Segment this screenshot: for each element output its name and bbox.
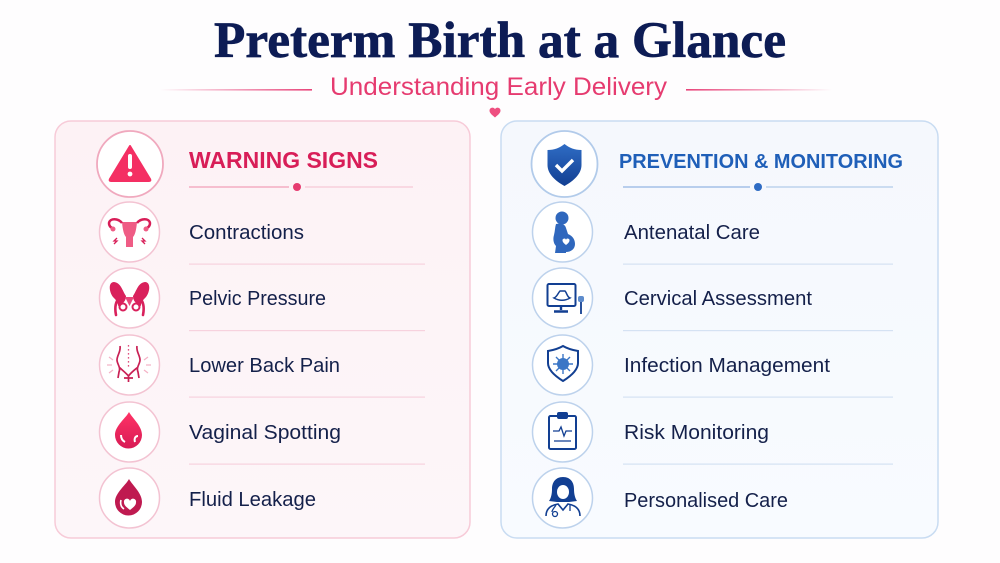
item: personalised care bbox=[532, 468, 788, 528]
item: vaginal spotting bbox=[100, 402, 341, 462]
panel heading: prevention and monitoring bbox=[532, 131, 903, 197]
item: risk monitoring bbox=[532, 402, 769, 462]
subtitle: Understanding Early Delivery bbox=[330, 73, 668, 101]
item: fluid leakage: Fluid Leakage bbox=[189, 489, 316, 511]
item: pelvic pressure bbox=[100, 268, 326, 328]
item: lower back pain: Lower Back Pain bbox=[189, 355, 340, 377]
item: infection management bbox=[532, 335, 830, 395]
item: cervical assessment: Cervical Assessment bbox=[624, 288, 812, 310]
panel: prevention and monitoring bbox=[501, 121, 938, 538]
panel heading: warning signs bbox=[97, 131, 413, 197]
item: cervical assessment bbox=[532, 268, 812, 328]
item: contractions: Contractions bbox=[189, 222, 304, 244]
item: personalised care: Personalised Care bbox=[624, 490, 788, 512]
item: risk monitoring: Risk Monitoring bbox=[624, 422, 769, 444]
panel: warning signs bbox=[55, 121, 470, 538]
item: antenatal care bbox=[532, 202, 760, 262]
title: Preterm Birth at a Glance bbox=[214, 13, 786, 69]
item: pelvic pressure: Pelvic Pressure bbox=[189, 288, 326, 310]
item: contractions bbox=[100, 202, 304, 262]
item: vaginal spotting: Vaginal Spotting bbox=[189, 422, 341, 444]
item: lower back pain bbox=[100, 335, 340, 395]
panel heading: prevention and monitoring: PREVENTION & MONITORING bbox=[619, 151, 903, 173]
panel heading: warning signs: WARNING SIGNS bbox=[189, 147, 378, 173]
item: infection management: Infection Management bbox=[624, 355, 830, 377]
item: fluid leakage bbox=[100, 468, 316, 528]
item: antenatal care: Antenatal Care bbox=[624, 222, 760, 244]
icon: heart bbox=[490, 108, 500, 118]
